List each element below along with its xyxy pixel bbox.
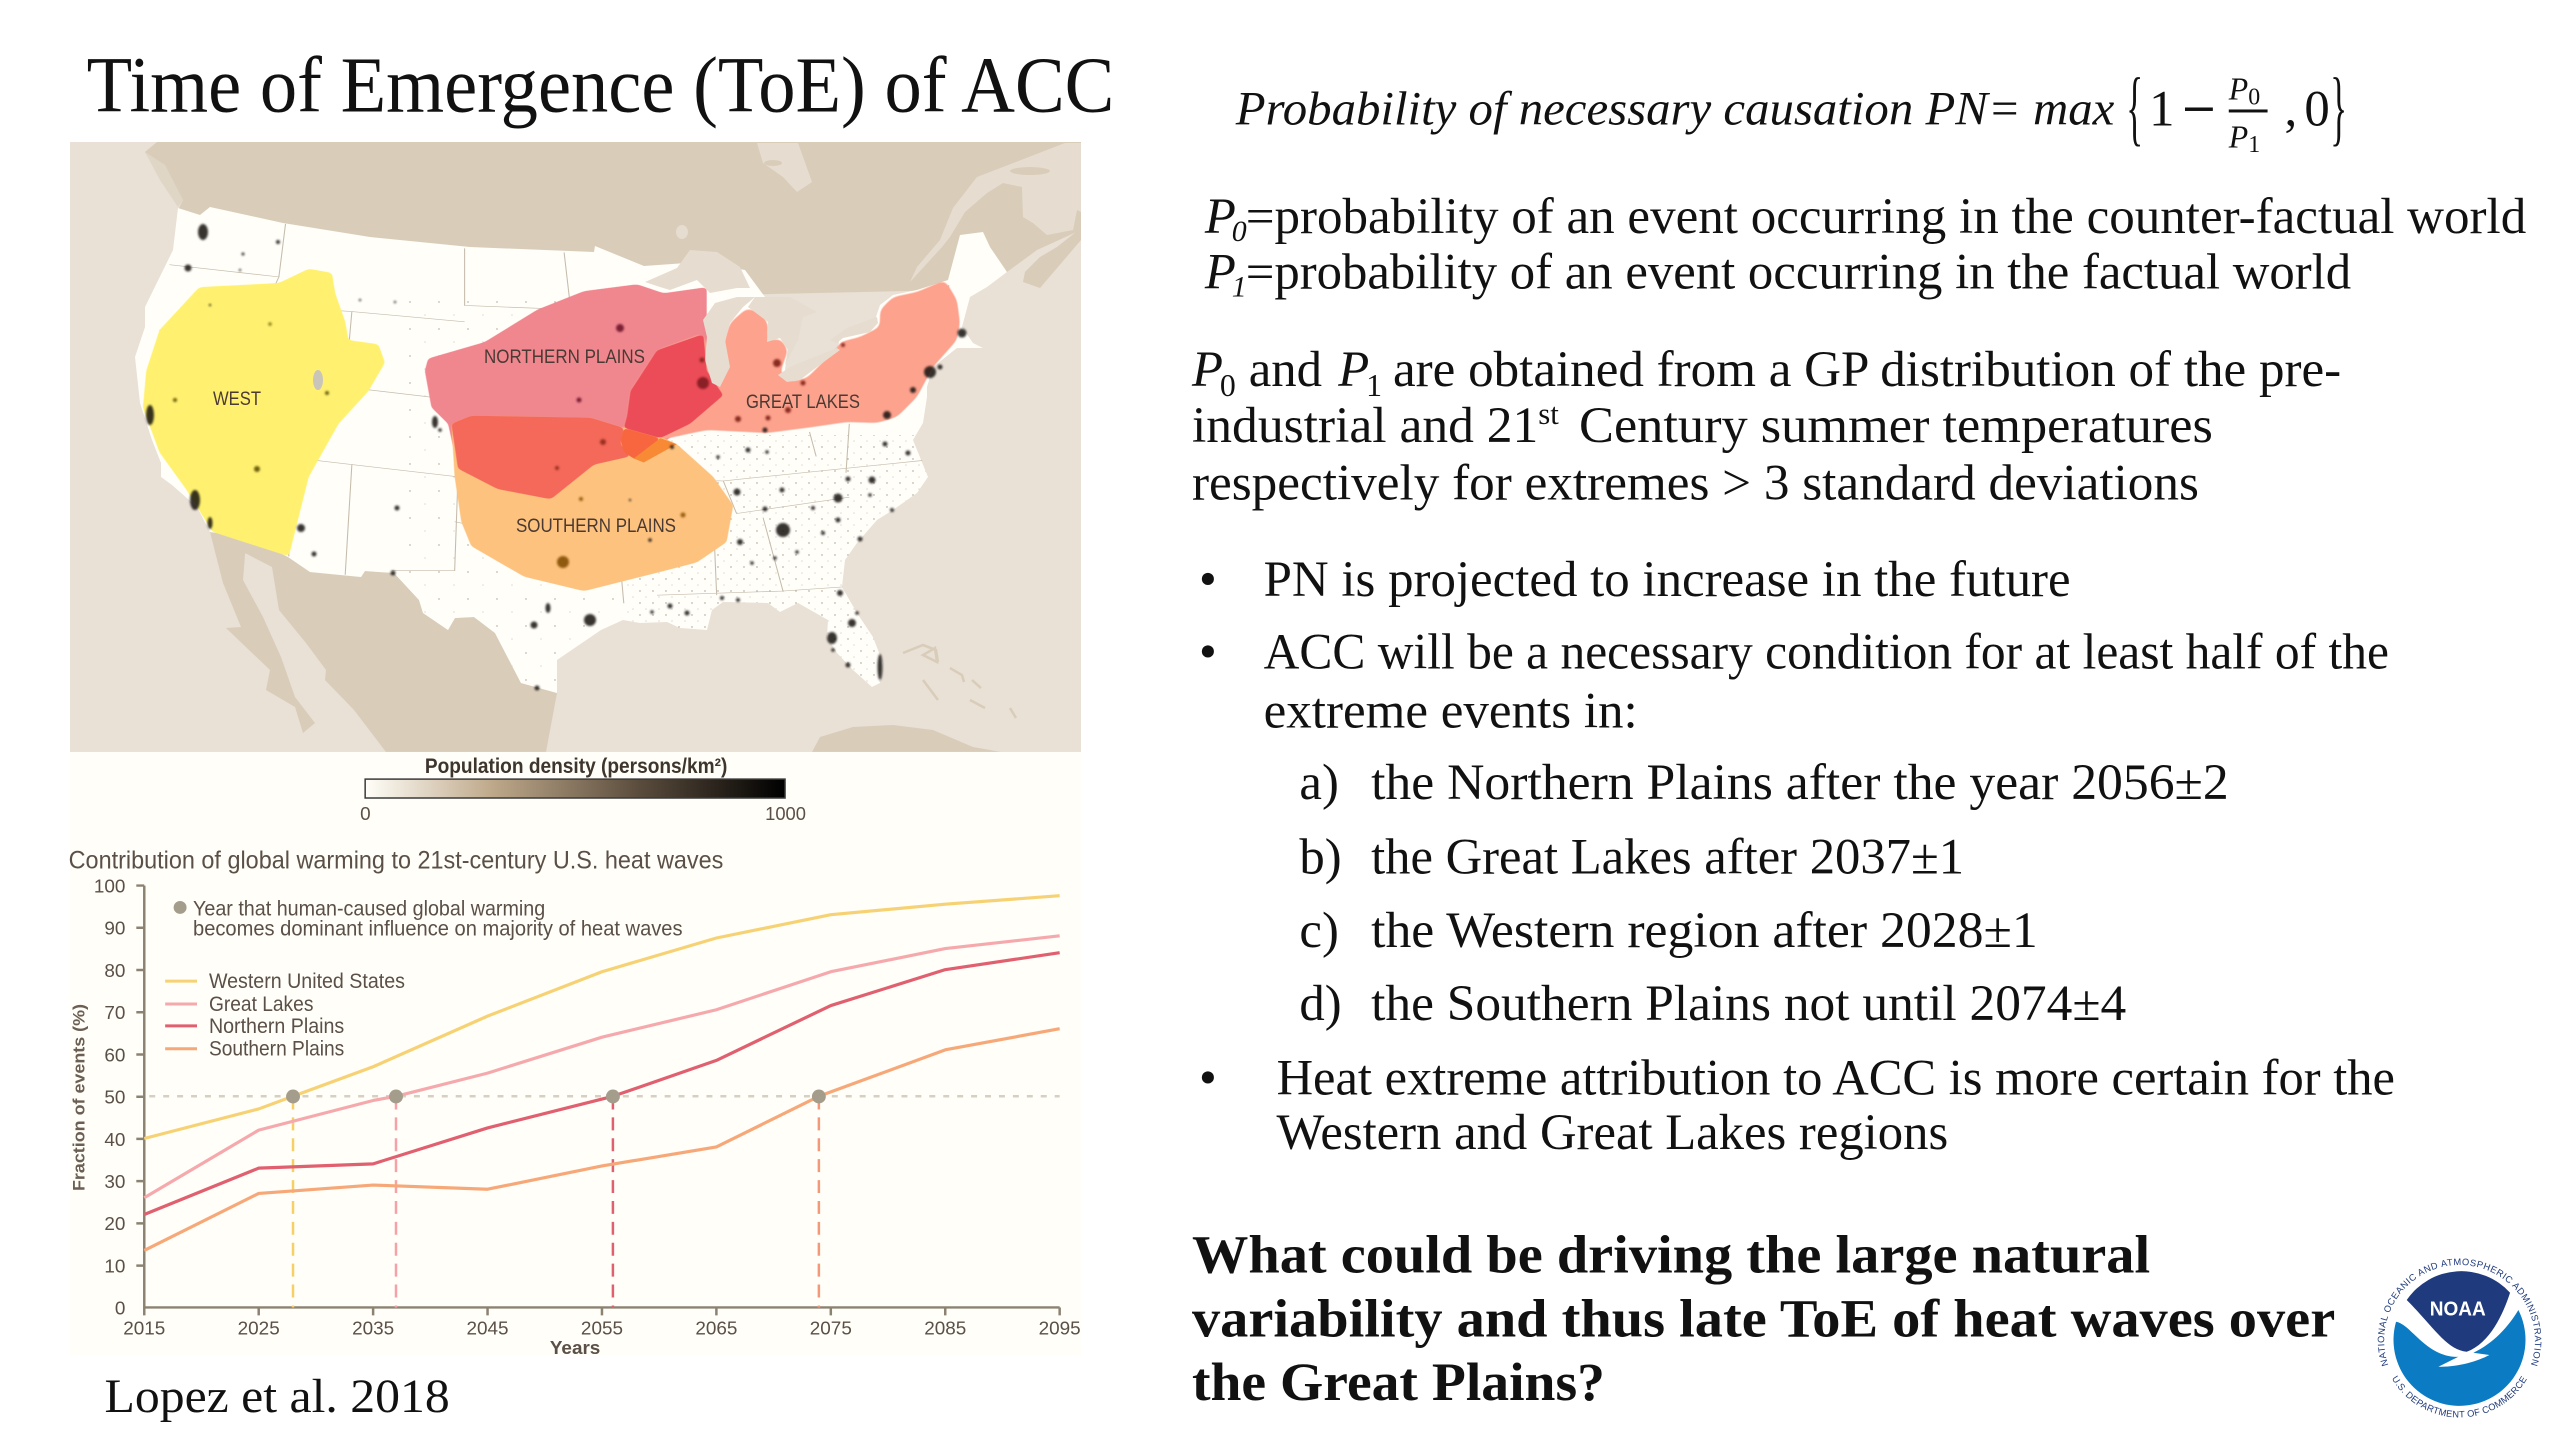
series legend: Western United States xyxy=(209,970,405,993)
chart title: Contribution of global warming to 21st-century U.S. heat waves xyxy=(69,847,723,875)
overlap: centre xyxy=(620,429,658,459)
formula: probability of necessary causation: P xyxy=(2229,72,2248,107)
annotation xyxy=(174,897,683,940)
closing question xyxy=(1192,1225,2335,1412)
formula: probability of necessary causation xyxy=(1235,61,2347,158)
region: Northern Plains xyxy=(424,284,707,447)
50 percent reference line xyxy=(149,1095,1060,1098)
y axis labels xyxy=(94,877,125,1319)
paragraph: GP distribution: respectively for extremes > 3 standard deviations xyxy=(1192,455,2199,511)
formula: probability of necessary causation: 1 xyxy=(2149,80,2175,136)
y axis labels: 80 xyxy=(104,961,125,982)
map labels xyxy=(213,347,860,537)
legend: population density colour bar: 1000 xyxy=(765,804,806,825)
y axis labels: 10 xyxy=(104,1257,125,1278)
y axis labels: 20 xyxy=(104,1214,125,1235)
Great Lakes water xyxy=(645,250,878,387)
region: Southern Plains xyxy=(451,416,733,591)
paragraph: GP distribution: P xyxy=(1191,341,1223,397)
bullet list: c) xyxy=(1299,902,1339,958)
annotation: becomes dominant influence on majority of heat waves xyxy=(193,917,683,940)
overlap: Northern Plains and Great Lakes xyxy=(624,334,723,438)
formula: probability of necessary causation: 1 xyxy=(2248,132,2260,158)
chart panel: cream background xyxy=(70,752,1081,1355)
x axis labels: 2075 xyxy=(810,1318,852,1339)
series legend: Great Lakes xyxy=(209,993,313,1016)
y axis labels: 60 xyxy=(104,1046,125,1067)
formula: probability of necessary causation: 0 xyxy=(2248,85,2260,111)
title: Time of Emergence (ToE) of ACC xyxy=(87,41,1114,129)
citation: Lopez et al. 2018 xyxy=(104,1370,450,1423)
bullet list: extreme events in: xyxy=(1264,682,1638,738)
definitions of P0 and P1: =probability of an event occurring in the counter-factual world xyxy=(1246,188,2526,244)
closing question: the Great Plains? xyxy=(1192,1352,1605,1412)
map labels: WEST xyxy=(213,389,261,410)
bullet list: a) xyxy=(1299,754,1339,810)
paragraph: GP distribution: P xyxy=(1337,341,1369,397)
bullet list: b) xyxy=(1299,829,1342,885)
bullet list: the Northern Plains after the year 2056±2 xyxy=(1371,754,2229,810)
definitions of P0 and P1: P xyxy=(1204,188,1236,244)
y axis labels: 30 xyxy=(104,1172,125,1193)
x axis labels: 2035 xyxy=(352,1318,394,1339)
x axis labels: 2085 xyxy=(924,1318,966,1339)
bullet list: the Southern Plains not until 2074±4 xyxy=(1371,975,2126,1031)
x axis labels: 2095 xyxy=(1039,1318,1081,1339)
bullet list: Western and Great Lakes regions xyxy=(1277,1104,1948,1160)
region: Great Lakes xyxy=(624,282,960,439)
population density blobs xyxy=(146,224,966,691)
overlap: Northern and Southern Plains xyxy=(451,416,630,499)
Mexico land xyxy=(245,537,557,752)
icon: NOAA logo: NATIONAL OCEANIC AND ATMOSPHERIC ADMINISTRATION xyxy=(2378,1258,2542,1366)
series legend: Southern Plains xyxy=(209,1038,344,1061)
annotation: Year that human-caused global warming xyxy=(193,897,545,920)
bullet list: d) xyxy=(1299,975,1342,1031)
bullet list: ACC will be a necessary condition for at least half of the xyxy=(1264,624,2389,680)
closing question: variability and thus late ToE of heat waves over xyxy=(1192,1288,2335,1348)
bullet list: the Western region after 2028±1 xyxy=(1371,902,2038,958)
state boundaries xyxy=(159,224,949,603)
formula: probability of necessary causation: P xyxy=(2229,119,2248,154)
paragraph: GP distribution: Century summer temperatures xyxy=(1579,397,2213,453)
x axis labels: 2025 xyxy=(238,1318,280,1339)
bullet list: • xyxy=(1199,624,1217,680)
formula: probability of necessary causation: 0 xyxy=(2304,80,2330,136)
map labels: NORTHERN PLAINS xyxy=(484,347,645,368)
y axis labels: 50 xyxy=(104,1087,125,1108)
emergence markers xyxy=(286,1090,826,1103)
paragraph: GP distribution xyxy=(1191,341,2341,511)
Canada land xyxy=(145,142,1081,300)
legend: population density colour bar xyxy=(360,755,806,825)
paragraph: GP distribution: industrial and 21 xyxy=(1192,397,1538,453)
legend: population density colour bar: 0 xyxy=(360,804,371,825)
closing question: What could be driving the large natural xyxy=(1192,1225,2150,1285)
definitions of P0 and P1: =probability of an event occurring in the factual world xyxy=(1246,244,2351,300)
x axis title: Years xyxy=(550,1338,600,1359)
y axis labels: 40 xyxy=(104,1130,125,1151)
bullet list: • xyxy=(1199,551,1217,607)
chart: contribution of global warming to heat waves xyxy=(69,847,1081,1359)
definitions of P0 and P1: 1 xyxy=(1232,271,1247,304)
region: West xyxy=(143,269,385,556)
paragraph: GP distribution: 0 xyxy=(1220,368,1236,403)
y axis labels: 70 xyxy=(104,1003,125,1024)
x axis labels: 2015 xyxy=(123,1318,165,1339)
map labels: GREAT LAKES xyxy=(746,392,860,413)
formula: probability of necessary causation: , xyxy=(2284,80,2297,136)
y axis title: Fraction of events (%) xyxy=(70,1004,89,1191)
y axis labels: 0 xyxy=(115,1298,125,1319)
bullet list: • xyxy=(1199,1050,1217,1106)
map labels: SOUTHERN PLAINS xyxy=(516,516,676,537)
population blobs within coloured regions xyxy=(173,322,845,568)
drop lines xyxy=(293,1097,819,1307)
axes xyxy=(136,886,1060,1315)
bullet list: the Great Lakes after 2037±1 xyxy=(1371,829,1964,885)
formula: probability of necessary causation: { xyxy=(2126,61,2143,154)
paragraph: GP distribution: 1 xyxy=(1366,368,1382,403)
icon: NOAA logo: U.S. DEPARTMENT OF COMMERCE xyxy=(2392,1376,2527,1418)
x axis labels: 2065 xyxy=(695,1318,737,1339)
definitions of P0 and P1: P xyxy=(1204,244,1236,300)
formula: probability of necessary causation: Probability of necessary causation PN= max xyxy=(1235,82,2114,135)
Cuba and Bahamas xyxy=(812,725,1007,753)
x axis labels: 2055 xyxy=(581,1318,623,1339)
bullet list: Heat extreme attribution to ACC is more certain for the xyxy=(1277,1050,2395,1106)
United States land xyxy=(135,207,1007,693)
x axis labels xyxy=(123,1318,1081,1339)
definitions of P0 and P1: 0 xyxy=(1232,215,1247,248)
definitions of P0 and P1 xyxy=(1204,188,2526,304)
formula: probability of necessary causation: } xyxy=(2330,61,2347,154)
paragraph: GP distribution: and xyxy=(1249,341,1322,397)
legend: population density colour bar: Population density (persons/km²) xyxy=(425,755,727,778)
y axis labels: 90 xyxy=(104,918,125,939)
line series xyxy=(144,896,1060,1250)
paragraph: GP distribution: are obtained from a GP distribution of the pre- xyxy=(1393,341,2341,397)
x axis labels: 2045 xyxy=(467,1318,509,1339)
icon: NOAA logo: NOAA xyxy=(2430,1298,2486,1321)
paragraph: GP distribution: st xyxy=(1538,397,1559,431)
y axis labels: 100 xyxy=(94,877,125,898)
bullet list xyxy=(1199,551,2395,1160)
map: heat wave regions and population density xyxy=(70,142,1083,753)
series legend xyxy=(165,970,405,1061)
series legend: Northern Plains xyxy=(209,1015,344,1038)
bullet list: PN is projected to increase in the future xyxy=(1264,551,2071,607)
icon: NOAA logo xyxy=(2378,1258,2542,1418)
